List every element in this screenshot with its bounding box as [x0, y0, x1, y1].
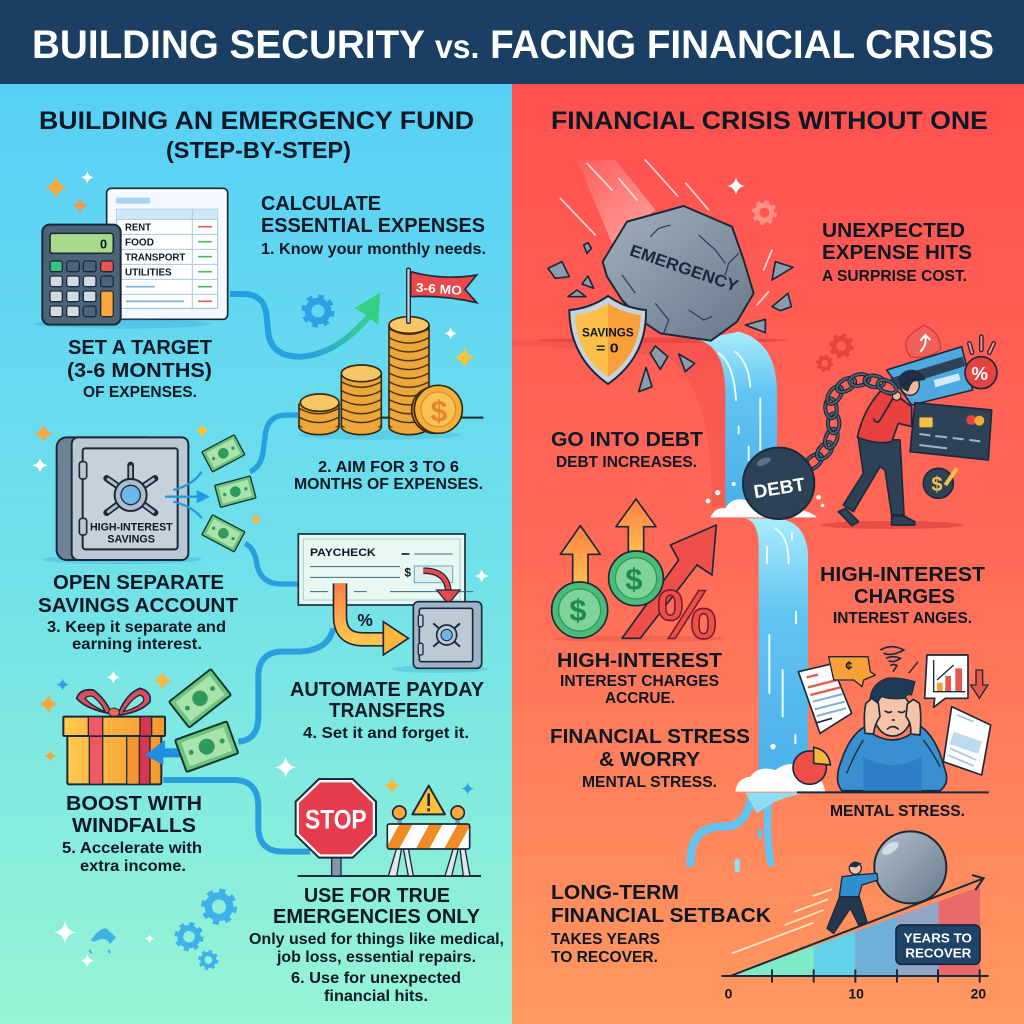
step text: open separate savings account: 3. Keep it separate and — [47, 619, 226, 636]
water drips below foam — [690, 793, 807, 872]
icon: expense sheet: TRANSPORT — [125, 253, 185, 264]
icon: expense sheet: UTILITIES — [125, 268, 172, 279]
icon: emergency boulder — [548, 206, 793, 392]
foam splash: debt ball — [706, 482, 824, 517]
step text: calculate essential expenses — [261, 192, 486, 258]
step text: financial stress and worry: FINANCIAL STRESS — [550, 725, 750, 748]
axis labels: 10 — [848, 985, 864, 1001]
icon: savings shield: = 0 — [596, 341, 619, 356]
title: BUILDING SECURITY vs. FACING FINANCIAL CRISIS — [32, 23, 994, 67]
step text: boost with windfalls: extra income. — [80, 858, 186, 875]
icon: stressed person with documents: ¢ — [845, 659, 852, 673]
icon: high-interest savings safe with bills — [42, 435, 256, 564]
step text: long-term financial setback: LONG-TERM — [551, 881, 679, 904]
step text: use for true emergencies only: job loss, essential repairs. — [276, 949, 476, 966]
step text: high-interest charges (right): HIGH-INTEREST — [820, 563, 985, 586]
step text: long-term financial setback — [551, 881, 771, 966]
icon: paycheck: $ — [404, 566, 411, 580]
icon: orange transfer arrow and mini safe: % — [357, 610, 373, 630]
connector: gift to stop sign — [163, 780, 310, 852]
connector: paycheck to gift — [238, 628, 333, 742]
years to recover badge: YEARS TO — [904, 931, 972, 946]
connector: sheet to target arrow — [230, 293, 380, 357]
step text: financial stress and worry: & WORRY — [599, 748, 700, 771]
icon: paycheck — [298, 534, 473, 605]
icon: coin stacks with flag — [298, 268, 483, 440]
step text: open separate savings account: earning interest. — [72, 636, 202, 653]
icon: high-interest savings safe with bills: SAVINGS — [107, 534, 155, 546]
step text: high-interest charges (right): CHARGES — [854, 585, 955, 608]
step text: use for true emergencies only — [249, 884, 504, 1005]
step text: boost with windfalls — [62, 792, 202, 875]
step text: set a target: SET A TARGET — [68, 336, 212, 359]
step text: open separate savings account: OPEN SEPARATE — [53, 571, 224, 594]
chart: years to recover ramp — [721, 831, 989, 1001]
icon: expense sheet: RENT — [125, 223, 151, 234]
icon: stop sign and barricade — [275, 757, 481, 876]
icon: stop sign and barricade: STOP — [305, 804, 367, 834]
axis labels: 20 — [971, 985, 986, 1001]
waterfall — [699, 332, 808, 792]
panel: financial crisis — [512, 84, 1024, 1024]
step text: set a target: (3-6 MONTHS) — [67, 359, 212, 382]
step text: high-interest (left): ACCRUE. — [605, 690, 675, 707]
step text: high-interest (left): INTEREST CHARGES — [560, 673, 719, 690]
step text: go into debt: GO INTO DEBT — [551, 428, 703, 451]
icon: person chained to debt with credit cards: $ — [931, 474, 942, 496]
step text: go into debt — [551, 428, 703, 471]
panel heading: left: BUILDING AN EMERGENCY FUND — [39, 107, 474, 135]
step text: use for true emergencies only: EMERGENCIES ONLY — [273, 905, 480, 928]
years to recover badge — [896, 925, 980, 964]
step text: use for true emergencies only: USE FOR TRUE — [304, 884, 450, 907]
step text: long-term financial setback: FINANCIAL SETBACK — [551, 904, 771, 927]
step text: aim for 3 to 6 months — [294, 459, 483, 493]
step text: high-interest charges (right) — [820, 563, 985, 627]
step text: boost with windfalls: WINDFALLS — [72, 814, 196, 837]
connector: safe to paycheck — [245, 543, 298, 584]
icon: paycheck: PAYCHECK — [310, 547, 376, 559]
icon: rising interest coins and arrows: $ — [569, 594, 586, 628]
step text: unexpected expense hits: A SURPRISE COST. — [822, 268, 967, 285]
panel heading: left: (STEP-BY-STEP) — [166, 137, 351, 163]
step text: aim for 3 to 6 months: 2. AIM FOR 3 TO 6 — [318, 459, 459, 476]
step text: automate payday transfers: AUTOMATE PAYDAY — [290, 678, 484, 701]
icon: stressed person with documents — [793, 647, 991, 792]
icon: coin stacks with flag: $ — [431, 396, 448, 429]
step text: long-term financial setback: TAKES YEARS — [551, 931, 660, 948]
icon: calculator: 0 — [100, 238, 107, 252]
icon: rising interest coins and arrows: $ — [625, 562, 642, 596]
cliff ledge — [512, 338, 787, 507]
step text: high-interest (left): HIGH-INTEREST — [557, 649, 722, 672]
icon: gear — [304, 297, 332, 325]
icon: rising interest coins and arrows — [552, 499, 725, 653]
icon: high-interest savings safe with bills: HIGH-INTEREST — [90, 522, 173, 534]
icon: savings shield: SAVINGS — [582, 326, 634, 340]
icon cluster: gears and sparkles — [54, 891, 235, 969]
icon: emergency boulder: EMERGENCY — [627, 241, 741, 296]
icon: calculator — [33, 225, 210, 329]
step text: long-term financial setback: TO RECOVER. — [551, 949, 658, 966]
step text: unexpected expense hits — [822, 219, 972, 285]
step text: automate payday transfers: TRANSFERS — [329, 699, 445, 722]
icon: debt ball — [743, 448, 814, 519]
step text: automate payday transfers: 4. Set it and forget it. — [303, 725, 469, 742]
step text: boost with windfalls: BOOST WITH — [66, 792, 202, 815]
axis labels — [725, 985, 986, 1001]
step text: high-interest charges (right): INTEREST ANGES. — [833, 610, 972, 627]
step text: boost with windfalls: 5. Accelerate with — [62, 840, 202, 857]
years to recover badge: RECOVER — [905, 946, 972, 961]
step text: aim for 3 to 6 months: MONTHS OF EXPENSES. — [294, 476, 483, 493]
icon: gift box with cash — [38, 669, 238, 784]
icon: orange transfer arrow and mini safe — [340, 583, 488, 673]
step text: financial stress and worry: MENTAL STRESS. — [582, 774, 717, 791]
panel heading: right: FINANCIAL CRISIS WITHOUT ONE — [551, 107, 988, 135]
step text: calculate essential expenses: ESSENTIAL EXPENSES — [261, 214, 485, 237]
step text: calculate essential expenses: CALCULATE — [261, 192, 381, 215]
step text: mental stress caption: MENTAL STRESS. — [830, 803, 965, 820]
axis labels: 0 — [725, 985, 733, 1001]
step text: go into debt: DEBT INCREASES. — [556, 454, 697, 471]
panel heading: left — [39, 107, 474, 163]
icon: savings shield — [569, 296, 646, 384]
decorative sparkles: left upper — [32, 171, 489, 583]
step text: use for true emergencies only: financial hits. — [324, 988, 428, 1005]
step text: open separate savings account: SAVINGS ACCOUNT — [38, 594, 238, 617]
step text: automate payday transfers — [290, 678, 484, 742]
step text: set a target: OF EXPENSES. — [83, 384, 197, 401]
icon: debt ball: DEBT — [752, 473, 807, 502]
icon: rising interest coins and arrows: % — [657, 575, 717, 653]
icon: person chained to debt with credit cards — [802, 325, 997, 529]
step text: calculate essential expenses: 1. Know your monthly needs. — [261, 241, 486, 258]
step text: use for true emergencies only: Only used for things like medical, — [249, 931, 504, 948]
header bar — [0, 0, 1024, 84]
step text: use for true emergencies only: 6. Use for unexpected — [291, 970, 461, 987]
light beam and speed lines — [560, 160, 775, 305]
panel: building an emergency fund — [0, 84, 512, 1024]
icon: expense sheet — [107, 188, 228, 319]
step text: unexpected expense hits: EXPENSE HITS — [822, 241, 972, 264]
step text: unexpected expense hits: UNEXPECTED — [822, 219, 965, 242]
connector: coins to safe — [250, 415, 298, 472]
step text: set a target — [67, 336, 212, 401]
step text: open separate savings account — [38, 571, 238, 653]
icon: expense sheet: FOOD — [125, 238, 154, 249]
step text: financial stress and worry — [550, 725, 750, 791]
icon: person chained to debt with credit cards: % — [971, 363, 988, 384]
foam splash: lower — [735, 764, 825, 792]
icon: coin stacks with flag: 3-6 MO — [415, 281, 462, 298]
step text: high-interest (left) — [557, 649, 722, 707]
